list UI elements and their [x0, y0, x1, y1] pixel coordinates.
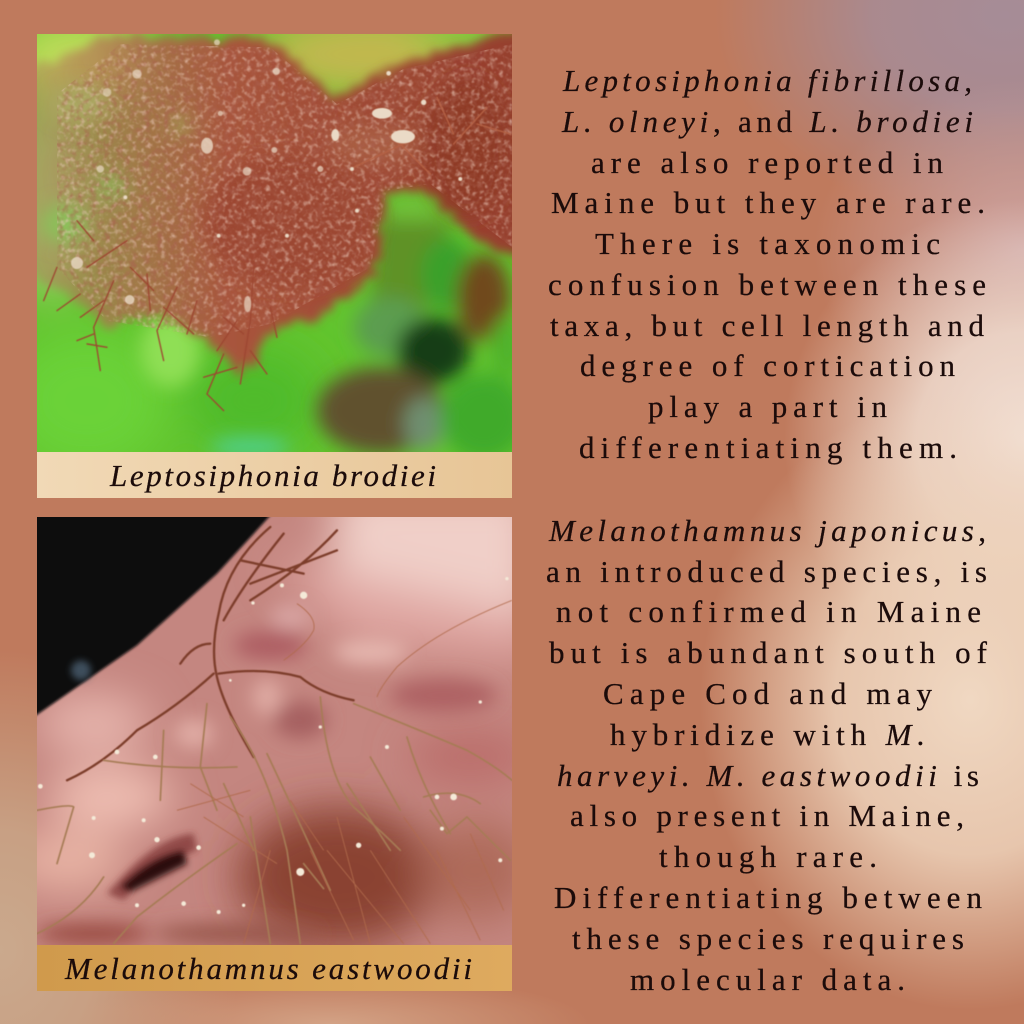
red seaweed mass — [24, 21, 530, 377]
text block: Leptosiphonia paragraph: L. olneyi, and L. brodiei — [561, 104, 973, 139]
text block: Melanothamnus paragraph: Differentiating between — [554, 880, 982, 915]
text block: Leptosiphonia paragraph: confusion between these — [548, 267, 986, 302]
photo: Melanothamnus eastwoodii — [37, 517, 512, 945]
text block: Melanothamnus paragraph: molecular data. — [630, 962, 905, 997]
photo: Leptosiphonia brodiei — [37, 34, 512, 452]
highlights — [71, 39, 462, 312]
fibrous texture — [57, 44, 512, 337]
text block: Melanothamnus paragraph: Cape Cod and may — [603, 676, 932, 711]
branching seaweed — [67, 527, 354, 780]
text block: Melanothamnus paragraph: but is abundant south of — [549, 635, 988, 670]
caption: Melanothamnus eastwoodii: Melanothamnus eastwoodii — [64, 951, 472, 986]
text block: Leptosiphonia paragraph: degree of cortication — [580, 348, 956, 383]
text block: Leptosiphonia paragraph — [548, 63, 986, 465]
text block: Melanothamnus paragraph: hybridize with M. — [610, 717, 925, 752]
caption: Melanothamnus eastwoodii — [37, 945, 512, 991]
caption: Leptosiphonia brodiei — [37, 452, 512, 498]
text block: Leptosiphonia paragraph: are also reported in — [591, 145, 944, 180]
text block: Melanothamnus paragraph: Melanothamnus japonicus, — [548, 513, 986, 548]
caption: Leptosiphonia brodiei: Leptosiphonia brodiei — [109, 458, 436, 493]
water droplets — [38, 577, 509, 914]
text block: Melanothamnus paragraph: also present in Maine, — [570, 798, 964, 833]
black background corner — [34, 514, 272, 717]
text block: Melanothamnus paragraph: these species requires — [572, 921, 964, 956]
text block: Leptosiphonia paragraph: differentiating them. — [579, 430, 957, 465]
text block: Leptosiphonia paragraph: Leptosiphonia fibrillosa, — [562, 63, 972, 98]
text block: Melanothamnus paragraph — [546, 513, 988, 997]
text block: Leptosiphonia paragraph: play a part in — [648, 389, 888, 424]
text block: Melanothamnus paragraph: harveyi. M. eastwoodii is — [557, 758, 979, 793]
seaweed strands — [44, 97, 510, 411]
text block: Melanothamnus paragraph: not confirmed in Maine — [556, 594, 981, 629]
text block: Melanothamnus paragraph: an introduced species, is — [546, 554, 987, 589]
text block: Leptosiphonia paragraph: Maine but they are rare. — [551, 185, 985, 220]
text block: Melanothamnus paragraph: though rare. — [659, 839, 877, 874]
text block: Leptosiphonia paragraph: There is taxonomic — [595, 226, 940, 261]
text block: Leptosiphonia paragraph: taxa, but cell length and — [550, 308, 984, 343]
dark slit — [107, 834, 197, 900]
